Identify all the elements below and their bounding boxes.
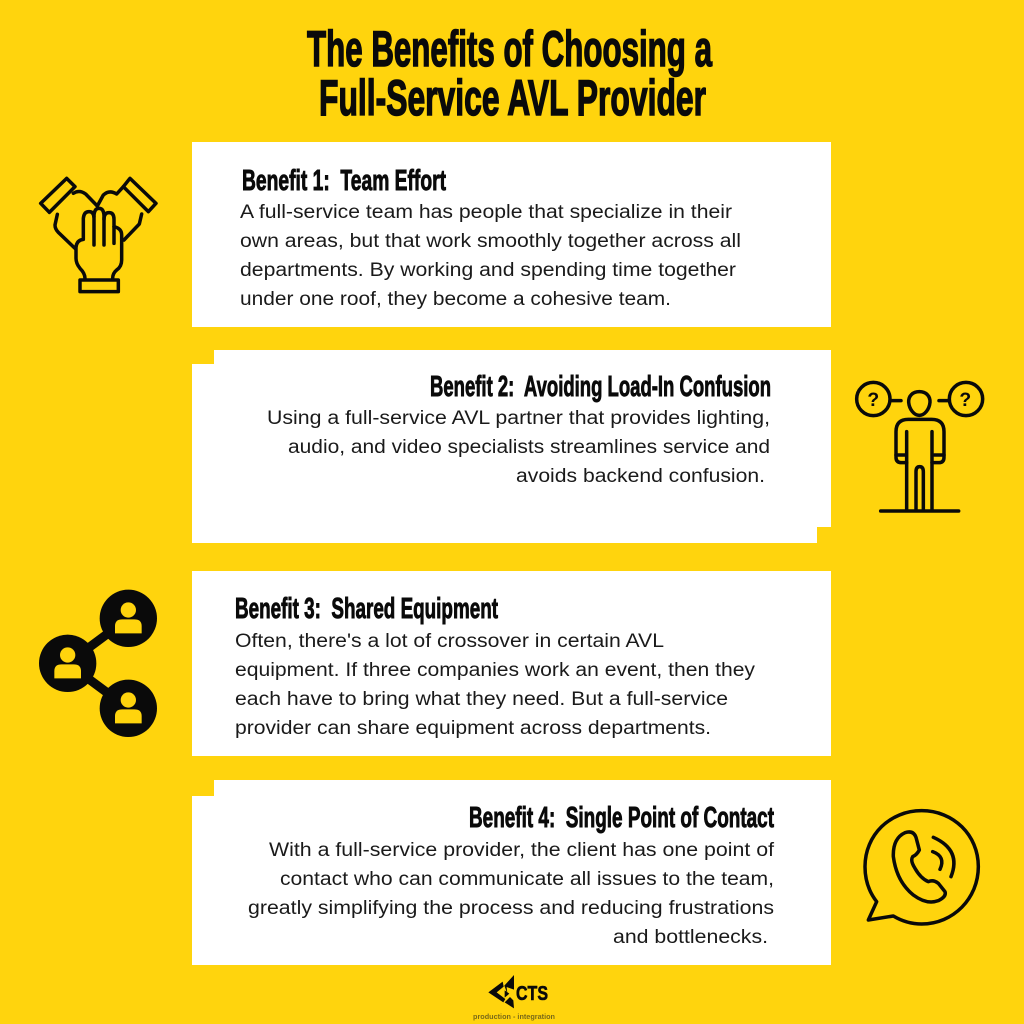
icon: person with question marks [857,382,983,511]
heading: benefit 2: Benefit 2: Avoiding Load-In Confusion [430,371,771,403]
heading: benefit 1: Benefit 1: Team Effort [242,165,446,197]
icon: person with question marks: ? [959,390,971,411]
logo mark [488,975,514,1008]
text: benefit 1 body: A full-service team has people that specialize in their [240,202,733,223]
heading: benefit 3: Benefit 3: Shared Equipment [235,593,498,625]
text: benefit 4 body [248,840,775,948]
panel: benefit 1 [192,142,831,327]
panel: benefit 3 [192,571,831,756]
text: benefit 3 body: each have to bring what they need. But a full-service [235,689,728,710]
icon: phone speech bubble [865,811,978,924]
text: benefit 4 body: and bottlenecks. [613,927,768,948]
panel: benefit 4 [192,780,831,965]
logo: CTS [473,975,555,1021]
text: benefit 2 body: avoids backend confusion. [516,466,765,487]
title: Full-Service AVL Provider [319,70,706,126]
text: benefit 1 body [240,202,741,310]
text: benefit 1 body: departments. By working and spending time together [240,260,737,281]
text: benefit 1 body: under one roof, they become a cohesive team. [240,289,671,310]
text: benefit 4 body: contact who can communicate all issues to the team, [280,869,774,890]
heading: benefit 4: Benefit 4: Single Point of Contact [469,802,774,834]
logo wordmark: CTS [516,983,548,1005]
text: benefit 3 body: Often, there's a lot of crossover in certain AVL [235,631,664,652]
text: benefit 1 body: own areas, but that work smoothly together across all [240,231,741,252]
icon: person with question marks: ? [867,390,879,411]
icon: team hands [41,178,156,292]
icon: shared network [39,590,157,737]
title [307,21,713,126]
text: benefit 4 body: With a full-service provider, the client has one point of [269,840,775,861]
text: benefit 2 body [267,408,770,487]
logo tagline: production - integration [473,1012,555,1021]
title: The Benefits of Choosing a [307,21,713,77]
text: benefit 2 body: audio, and video specialists streamlines service and [288,437,770,458]
panel: benefit 2 [192,350,831,543]
text: benefit 3 body: equipment. If three companies work an event, then they [235,660,756,681]
text: benefit 2 body: Using a full-service AVL partner that provides lighting, [267,408,770,429]
text: benefit 3 body: provider can share equipment across departments. [235,718,711,739]
text: benefit 3 body [235,631,756,739]
text: benefit 4 body: greatly simplifying the process and reducing frustrations [248,898,774,919]
